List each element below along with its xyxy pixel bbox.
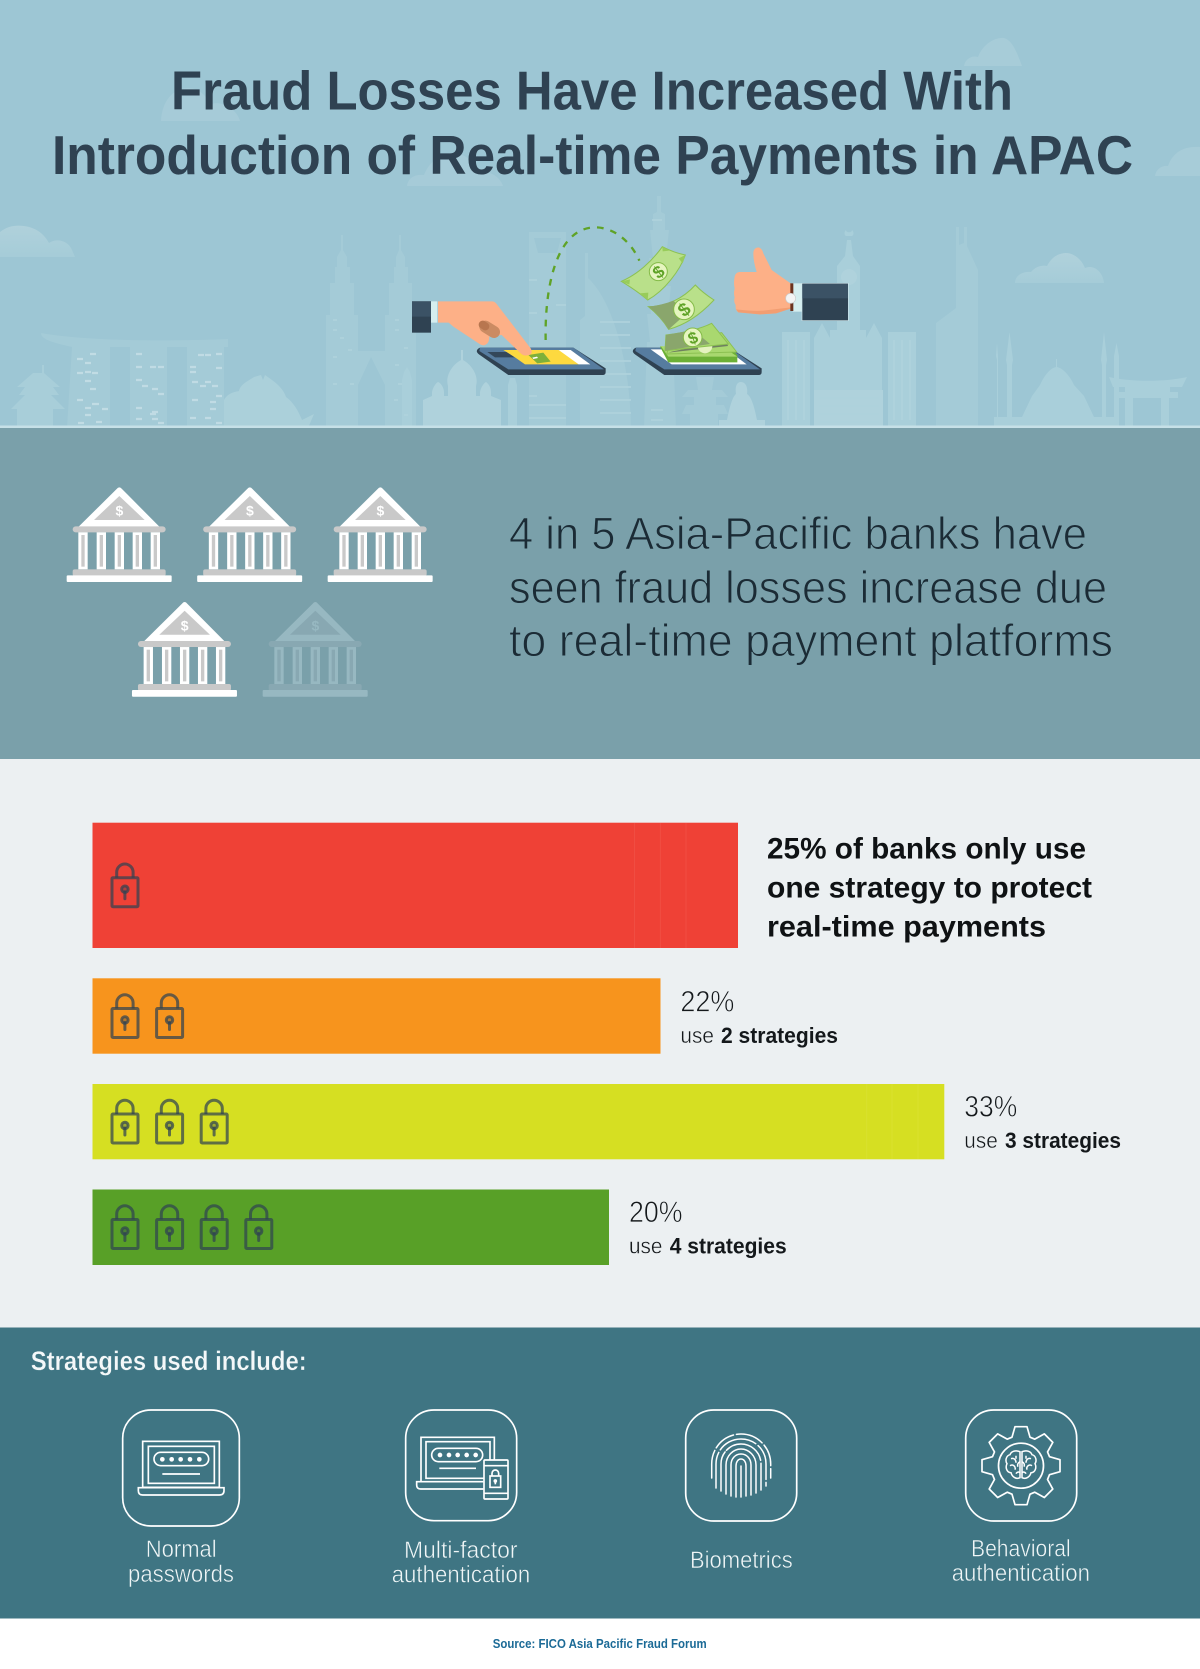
label: normal passwords	[128, 1536, 234, 1588]
statement text: to real-time payment platforms	[509, 615, 1113, 666]
label: behavioral authentication: Behavioral	[971, 1536, 1071, 1563]
mosque	[994, 332, 1119, 428]
source line: Source: FICO Asia Pacific Fraud Forum	[493, 1637, 707, 1651]
title: Fraud Losses Have Increased With	[171, 59, 1013, 121]
panel: header sky	[0, 0, 1200, 428]
icon: bank 4: $	[181, 617, 189, 633]
right tablet	[633, 348, 762, 375]
label: 33%	[964, 1091, 1121, 1153]
label: normal passwords: passwords	[128, 1561, 234, 1588]
icon: multi-factor laptop and phone	[406, 1410, 517, 1521]
label: 33%: 3 strategies	[1005, 1128, 1121, 1153]
bar: 25% one strategy	[92, 823, 738, 948]
money stack	[660, 323, 737, 362]
icon: locks	[112, 1206, 272, 1248]
petronas towers	[326, 235, 416, 428]
callout: 25%: 25% of banks only use	[767, 832, 1086, 865]
label: 22%: 2 strategies	[721, 1023, 838, 1048]
label: 20%: 20%	[629, 1196, 682, 1229]
icon: locks	[112, 1100, 227, 1143]
label: 20%	[629, 1196, 787, 1258]
skyline windows	[77, 354, 222, 423]
icon: normal passwords laptop	[123, 1410, 239, 1526]
dashed transfer arc	[546, 227, 639, 340]
panel: strategy bar chart	[0, 759, 1200, 1328]
title	[52, 59, 1133, 186]
taipei 101	[644, 196, 676, 428]
icon: bank 1: $	[115, 503, 123, 519]
money stack: $	[685, 327, 701, 349]
label: biometrics: Biometrics	[690, 1547, 793, 1574]
taj mahal	[423, 350, 501, 428]
icon: bank 2: $	[246, 503, 254, 519]
right hand thumbs up	[734, 247, 848, 321]
icon: bank 4	[132, 602, 237, 697]
minaret	[402, 367, 412, 428]
icon: bank 1	[67, 487, 172, 582]
marina bay sands	[41, 333, 228, 428]
icon: bank 5 faded: $	[311, 617, 319, 633]
statement text: 4 in 5 Asia-Pacific banks have	[509, 508, 1087, 559]
statement text	[509, 508, 1113, 666]
torii	[1109, 377, 1187, 428]
icon: bank 5 faded	[263, 602, 368, 697]
label: 22%: 22%	[680, 986, 734, 1019]
small pagoda	[682, 377, 728, 428]
heading: strategies used include: Strategies used include:	[31, 1346, 307, 1376]
world financial centre	[529, 232, 566, 428]
burj al arab	[580, 253, 631, 428]
callout: 25%	[767, 832, 1092, 944]
icon: behavioral authentication gear and brain	[966, 1410, 1077, 1521]
label: 33%: 33%	[964, 1091, 1017, 1124]
icon: bank 2	[197, 487, 302, 582]
bar: 33% three strategies	[92, 1084, 944, 1159]
label: behavioral authentication: authentication	[952, 1560, 1090, 1587]
icon: biometrics fingerprint	[686, 1410, 797, 1521]
buddha	[719, 382, 765, 428]
callout: 25%: real-time payments	[767, 911, 1046, 944]
clouds	[0, 38, 1200, 283]
clock tower complex	[782, 323, 916, 428]
bank of china	[936, 227, 978, 428]
falling banknote 1	[621, 247, 685, 300]
falling banknote 1: $	[649, 261, 669, 283]
illustration: mobile payment hands and money	[412, 227, 848, 375]
skyline	[11, 196, 1187, 428]
title: Introduction of Real-time Payments in APAC	[52, 124, 1133, 186]
bar: 20% four strategies	[92, 1190, 609, 1265]
falling banknote 2: $	[674, 298, 695, 321]
statement text: seen fraud losses increase due	[509, 562, 1107, 613]
icon: lock	[112, 864, 138, 907]
label: 20%: use	[629, 1234, 662, 1258]
callout: 25%: one strategy to protect	[767, 871, 1092, 904]
icon: bank 3	[328, 487, 433, 582]
label: multi-factor authentication: authentication	[392, 1562, 530, 1588]
panel: bank statistic	[0, 428, 1200, 759]
label: normal passwords: Normal	[146, 1536, 217, 1563]
icon: bank 3: $	[376, 503, 384, 519]
falling banknote 2	[648, 285, 714, 329]
panel: strategies used	[0, 1328, 1200, 1618]
left hand	[412, 301, 532, 356]
icon: locks	[112, 995, 183, 1038]
lotus temple	[224, 375, 314, 428]
label: multi-factor authentication: Multi-factor	[404, 1537, 518, 1564]
label: 22%	[680, 986, 838, 1048]
label: behavioral authentication	[952, 1536, 1090, 1587]
pagoda	[11, 365, 65, 428]
ground line	[0, 426, 1200, 428]
label: 20%: 4 strategies	[670, 1234, 787, 1258]
label: 33%: use	[964, 1128, 998, 1153]
label: multi-factor authentication	[392, 1537, 530, 1588]
label: 22%: use	[680, 1023, 714, 1048]
bar: 22% two strategies	[92, 978, 660, 1054]
left tablet	[477, 348, 606, 375]
